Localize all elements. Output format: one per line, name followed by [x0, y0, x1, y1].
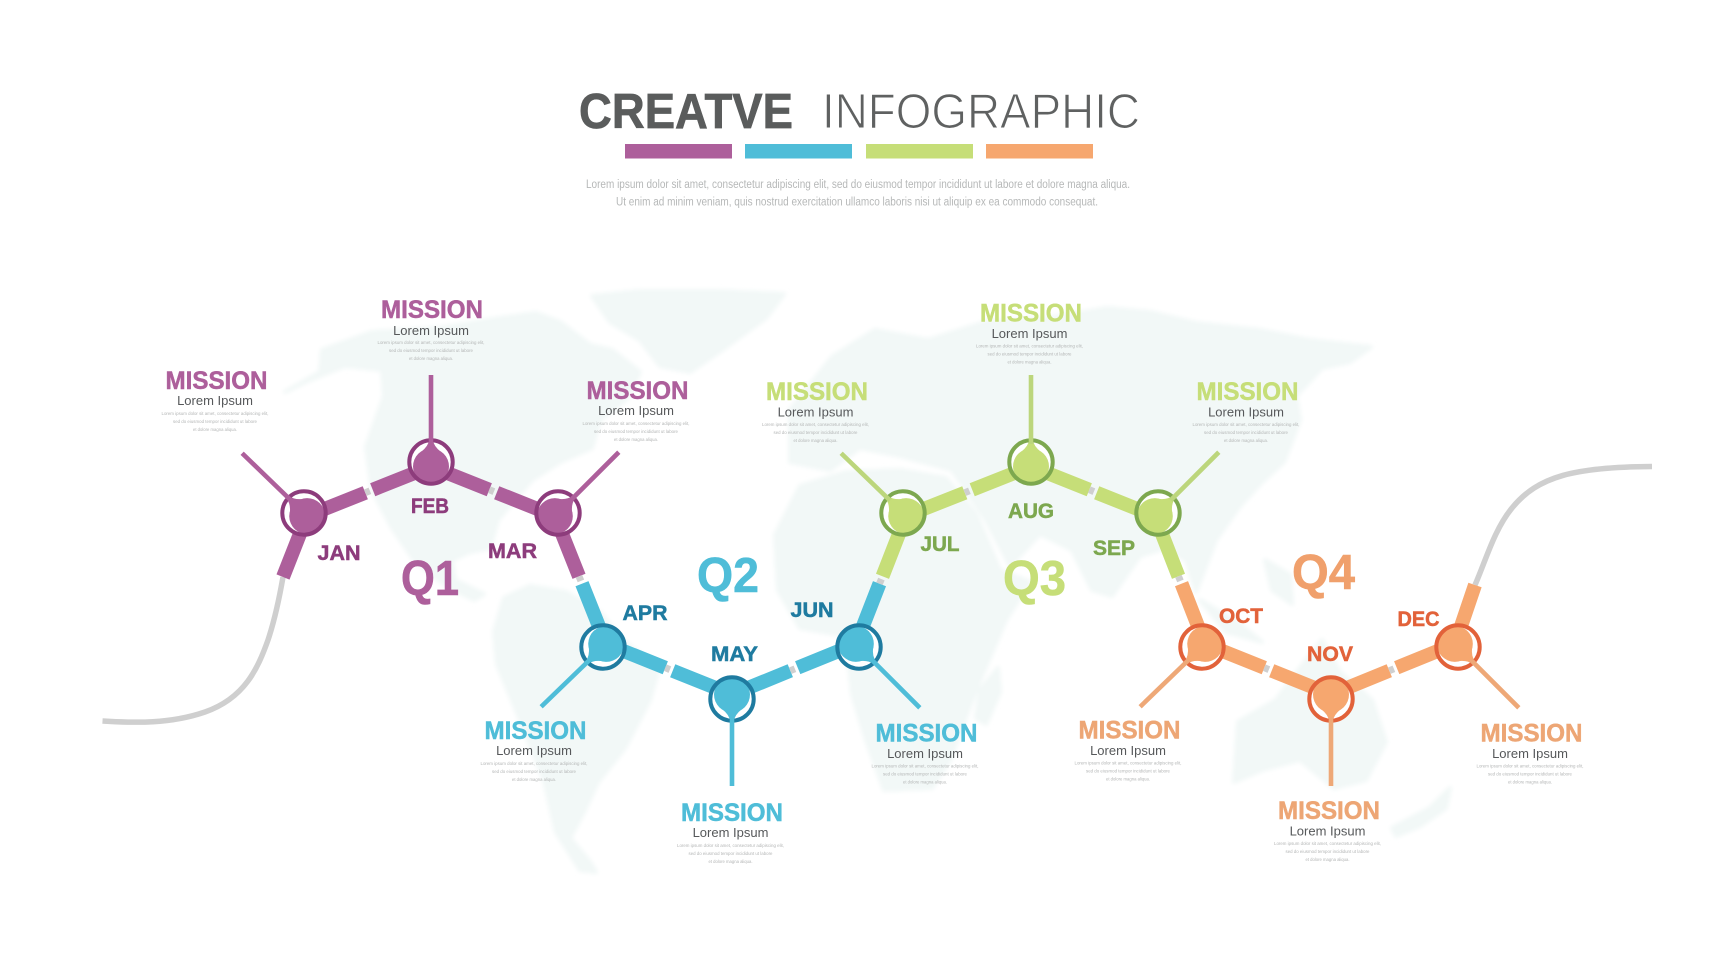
mission December — [1476, 720, 1584, 786]
node: August — [1009, 375, 1053, 484]
node: October — [1125, 616, 1233, 722]
month labels Q2 — [622, 599, 834, 666]
quarter 2 timeline — [480, 549, 978, 865]
mission August: Lorem Ipsum — [992, 326, 1067, 341]
mission November: Lorem Ipsum — [1290, 824, 1365, 838]
mission January: Lorem Ipsum — [177, 393, 253, 408]
mission October: Lorem Ipsum — [1090, 743, 1166, 758]
mission May: Lorem Ipsum — [693, 825, 768, 840]
mission December: Lorem Ipsum — [1492, 746, 1568, 761]
mission February: Lorem Ipsum — [393, 323, 469, 338]
Q4 chain segments — [1182, 584, 1475, 694]
mission January: Lorem ipsum dolor sit amet, consectetur adipiscing elit, — [162, 411, 268, 417]
quarter 1 timeline — [162, 296, 690, 606]
mission May: Lorem ipsum dolor sit amet, consectetur adipiscing elit, — [677, 843, 784, 849]
mission July: MISSION — [766, 378, 868, 406]
mission November: Lorem ipsum dolor sit amet, consectetur adipiscing elit, — [1274, 841, 1381, 847]
node: May — [710, 676, 754, 786]
mission August: sed do eiusmod tempor incididunt ut labore — [988, 352, 1072, 358]
mission September: Lorem ipsum dolor sit amet, consectetur adipiscing elit, — [1192, 422, 1300, 428]
month labels Q1: JAN — [318, 542, 360, 565]
mission September: sed do eiusmod tempor incididunt ut labore — [1204, 430, 1288, 436]
mission December: MISSION — [1480, 720, 1582, 748]
colour key bars — [625, 144, 1093, 158]
mission February: MISSION — [381, 296, 483, 324]
month labels Q3: JUL — [920, 533, 960, 556]
mission March — [582, 377, 690, 443]
Q4 label: Q4 — [1292, 546, 1355, 600]
left grey connector curve — [102, 577, 283, 722]
mission June: sed do eiusmod tempor incididunt ut labore — [883, 772, 967, 778]
mission June: et dolore magna aliqua. — [903, 780, 947, 786]
title: INFOGRAPHIC — [822, 85, 1140, 139]
mission November: et dolore magna aliqua. — [1306, 857, 1350, 863]
mission September — [1192, 378, 1300, 444]
mission April — [480, 717, 588, 783]
Q1 chain segments — [283, 466, 581, 581]
mission July: Lorem ipsum dolor sit amet, consectetur adipiscing elit, — [762, 422, 869, 428]
node: April — [526, 616, 634, 722]
mission May: MISSION — [681, 799, 783, 827]
mission July: Lorem Ipsum — [778, 404, 853, 420]
mission November: sed do eiusmod tempor incididunt ut labore — [1286, 849, 1370, 855]
month labels Q3 — [920, 500, 1135, 560]
mission August: MISSION — [980, 300, 1082, 328]
quarter 3 timeline — [762, 300, 1300, 606]
node: June — [828, 616, 935, 723]
mission January: sed do eiusmod tempor incididunt ut labore — [173, 419, 257, 425]
month labels Q4: NOV — [1307, 643, 1353, 666]
Q2 label: Q2 — [697, 549, 759, 603]
mission June — [872, 720, 978, 786]
mission April: sed do eiusmod tempor incididunt ut labore — [492, 769, 576, 775]
right grey connector curve — [1475, 466, 1652, 585]
mission May — [677, 799, 784, 865]
subtitle text: Lorem ipsum dolor sit amet, consectetur adipiscing elit, sed do eiusmod tempor incididunt ut labore et dolore magna aliqua. — [586, 179, 1130, 191]
mission March: MISSION — [586, 377, 688, 405]
mission October: Lorem ipsum dolor sit amet, consectetur adipiscing elit, — [1074, 760, 1182, 766]
mission April: MISSION — [484, 717, 586, 745]
mission May: et dolore magna aliqua. — [708, 859, 752, 865]
mission October: sed do eiusmod tempor incididunt ut labore — [1086, 768, 1170, 774]
title: CREATVE — [579, 85, 793, 139]
mission December: et dolore magna aliqua. — [1508, 780, 1552, 786]
mission November: MISSION — [1278, 797, 1380, 825]
node: March — [527, 437, 634, 544]
mission April: Lorem Ipsum — [496, 743, 572, 758]
mission August: Lorem ipsum dolor sit amet, consectetur adipiscing elit, — [976, 344, 1083, 350]
mission November — [1274, 797, 1381, 863]
month labels Q1: MAR — [488, 540, 537, 563]
mission May: sed do eiusmod tempor incididunt ut labore — [688, 851, 773, 857]
node: January — [227, 438, 335, 544]
mission September: MISSION — [1196, 378, 1298, 406]
mission October — [1074, 716, 1182, 782]
title — [579, 85, 1140, 139]
mission July — [762, 378, 869, 444]
node: December — [1427, 616, 1534, 723]
mission September: et dolore magna aliqua. — [1224, 438, 1268, 444]
node: July — [826, 438, 934, 544]
subtitle text — [586, 179, 1130, 208]
month labels Q3: AUG — [1008, 500, 1054, 523]
month labels Q1 — [318, 495, 537, 565]
mission June: Lorem Ipsum — [887, 746, 963, 761]
quarter 4 timeline — [1074, 546, 1584, 863]
month labels Q1: FEB — [411, 495, 449, 518]
mission February: Lorem ipsum dolor sit amet, consectetur adipiscing elit, — [378, 340, 484, 346]
node: September — [1127, 437, 1234, 544]
mission February: sed do eiusmod tempor incididunt ut labore — [389, 348, 473, 354]
month labels Q4: OCT — [1219, 605, 1263, 628]
mission March: et dolore magna aliqua. — [614, 437, 658, 443]
mission June: MISSION — [876, 720, 978, 748]
month labels Q2: MAY — [711, 643, 758, 666]
mission August: et dolore magna aliqua. — [1008, 360, 1052, 366]
mission March: Lorem ipsum dolor sit amet, consectetur adipiscing elit, — [582, 421, 690, 427]
Q3 label: Q3 — [1003, 552, 1066, 606]
month labels Q4: DEC — [1398, 608, 1440, 631]
month labels Q4 — [1219, 605, 1440, 666]
Q2 chain segments — [582, 579, 881, 694]
mission February — [378, 296, 484, 362]
month labels Q2: JUN — [790, 599, 834, 622]
mission April: Lorem ipsum dolor sit amet, consectetur adipiscing elit, — [480, 761, 588, 767]
node: November — [1309, 676, 1353, 786]
mission April: et dolore magna aliqua. — [512, 777, 556, 783]
mission March: Lorem Ipsum — [598, 403, 674, 418]
mission January: MISSION — [166, 367, 268, 395]
subtitle text: Ut enim ad minim veniam, quis nostrud exercitation ullamco laboris nisi ut aliquip ex ea commodo consequat. — [616, 196, 1098, 208]
mission October: et dolore magna aliqua. — [1106, 776, 1150, 782]
Q1 label: Q1 — [401, 552, 459, 606]
world map background — [285, 291, 1450, 872]
mission December: Lorem ipsum dolor sit amet, consectetur adipiscing elit, — [1476, 764, 1584, 770]
mission August — [976, 300, 1083, 366]
mission June: Lorem ipsum dolor sit amet, consectetur adipiscing elit, — [872, 764, 978, 770]
mission March: sed do eiusmod tempor incididunt ut labore — [594, 429, 678, 435]
mission February: et dolore magna aliqua. — [409, 356, 453, 362]
mission September: Lorem Ipsum — [1208, 404, 1284, 420]
node: February — [409, 375, 453, 484]
mission January: et dolore magna aliqua. — [193, 427, 237, 433]
month labels Q3: SEP — [1093, 537, 1135, 560]
mission October: MISSION — [1078, 716, 1180, 744]
month labels Q2: APR — [622, 602, 668, 625]
mission July: sed do eiusmod tempor incididunt ut labore — [774, 430, 858, 436]
mission December: sed do eiusmod tempor incididunt ut labore — [1488, 772, 1572, 778]
mission January — [162, 367, 268, 433]
Q3 chain segments — [882, 466, 1180, 581]
mission July: et dolore magna aliqua. — [794, 438, 838, 444]
